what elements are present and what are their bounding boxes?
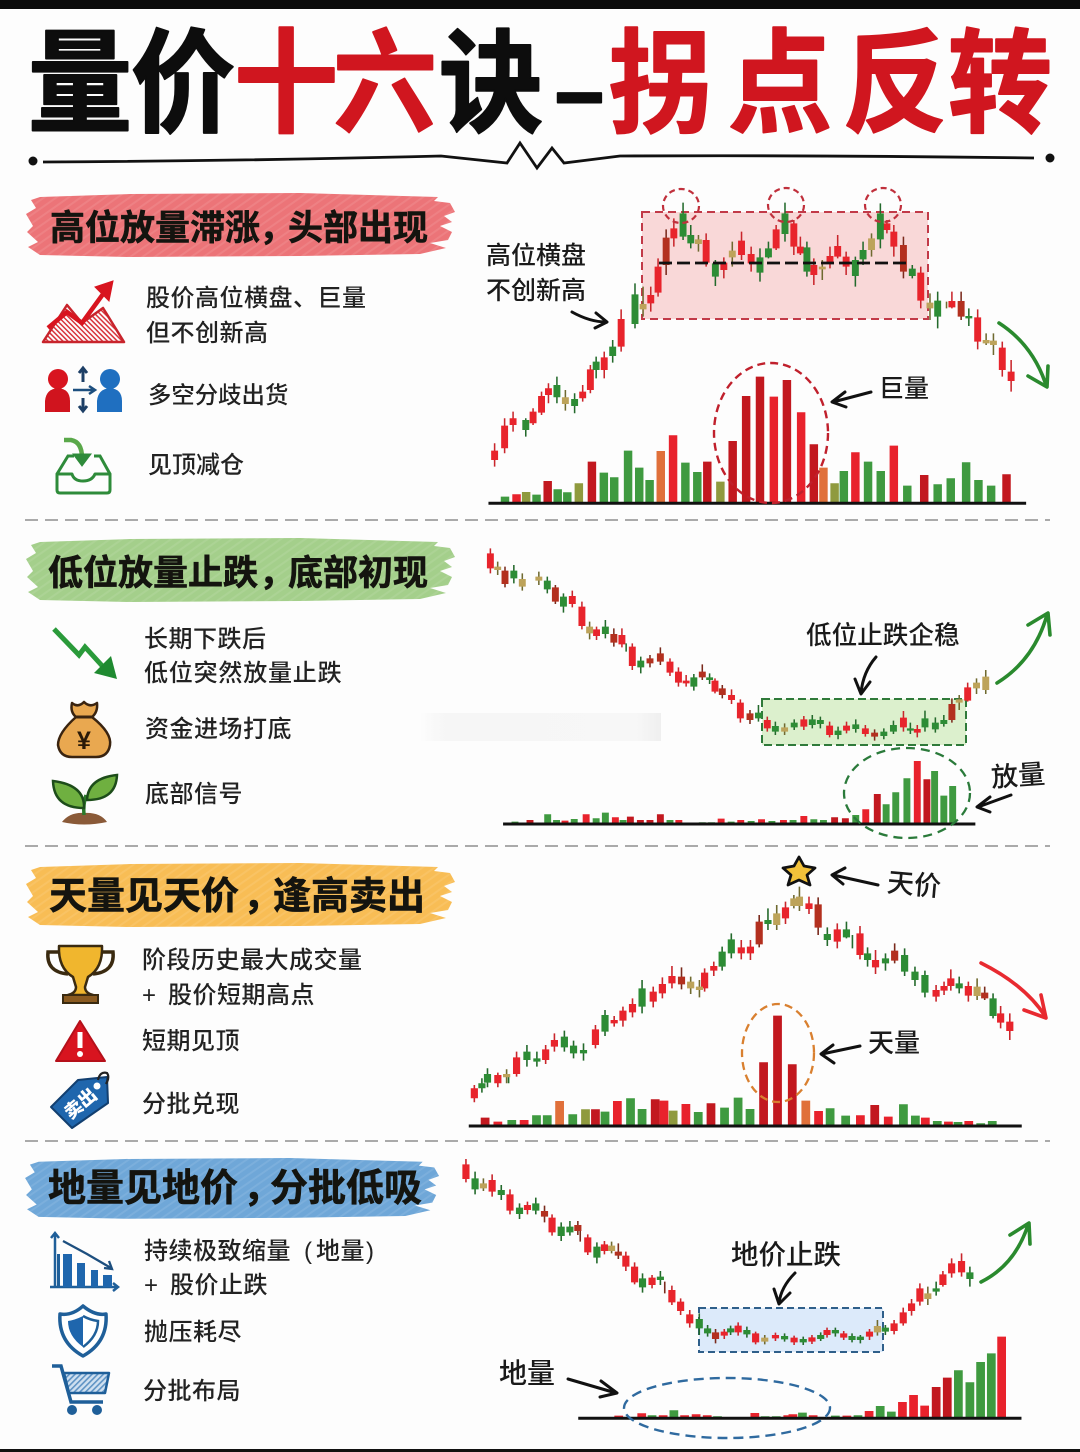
heading: section 1: 高位放量滞涨 — [50, 209, 260, 248]
arrow: to high range — [572, 312, 607, 328]
text: divergence: 多空分歧出货 — [148, 382, 288, 408]
volume bars: bottom formation — [503, 761, 975, 824]
arrow: rising green — [981, 1223, 1030, 1282]
heading: section 1 — [26, 193, 455, 257]
heading: section 2: 低位放量止跌 — [48, 554, 258, 593]
text: short term high: + — [142, 982, 157, 1009]
heading: section 4 — [25, 1158, 439, 1219]
icon: inbox reduce position — [57, 440, 110, 493]
icon: bulls vs bears — [45, 368, 122, 412]
text: largest volume: 阶段历史最大成交量 — [142, 947, 362, 974]
icon: green falling zigzag arrow — [54, 629, 117, 679]
text: short term top: 短期见顶 — [142, 1028, 240, 1055]
icon: rising arrow over mountains — [43, 281, 124, 342]
arrow: to peak volume — [821, 1045, 860, 1063]
icon: sell tag — [51, 1073, 108, 1128]
heading: section 1: ， — [259, 209, 294, 248]
label: sideways at high: 高位横盘 — [486, 242, 586, 270]
icon: shield — [60, 1306, 106, 1356]
label: peak price: 天价 — [886, 868, 942, 902]
text: after long decline: 长期下跌后 — [144, 626, 266, 653]
text: price stops falling: + — [144, 1272, 159, 1299]
heading text: section 4: 分批低吸 — [270, 1168, 422, 1210]
candlesticks: floor — [466, 1159, 970, 1345]
panel: section 1 high-volume stall — [26, 188, 1048, 503]
label: peak volume: 天量 — [868, 1028, 920, 1058]
icon: star at peak — [783, 857, 815, 885]
icon: money bag: ¥ — [77, 727, 91, 755]
label: low stabilization: 低位止跌企稳 — [806, 621, 960, 650]
label: floor volume: 地量 — [499, 1358, 555, 1389]
text: volume surge at low: 低位突然放量止跌 — [144, 660, 342, 687]
arrow: rising green — [997, 613, 1050, 683]
panel: section 4 floor volume floor price — [25, 1158, 1030, 1438]
heading: section 3: ， — [243, 876, 281, 918]
arrow: to floor volume — [568, 1379, 617, 1397]
text: extreme shrink: ) — [366, 1238, 374, 1265]
label: huge volume: 巨量 — [879, 375, 929, 403]
icon: sprout — [53, 775, 117, 824]
candlesticks: bottom formation — [490, 548, 986, 741]
callout box: high range — [642, 212, 928, 319]
heading: section 3 — [26, 863, 455, 927]
panel: section 3 peak volume peak price — [26, 857, 1046, 1128]
heading: section 3: 天量见天价 — [49, 876, 239, 918]
heading: section 3: 逢高卖出 — [273, 876, 425, 918]
text: build position in batches: 分批布局 — [143, 1378, 241, 1405]
heading: section 1: 头部出现 — [288, 209, 428, 248]
title: 反 — [843, 21, 947, 147]
title: 点 — [728, 21, 832, 147]
heading: section 2: ， — [259, 554, 294, 593]
callout: huge volume ellipse — [714, 363, 828, 503]
callout: volume surge ellipse — [844, 748, 970, 838]
text: no new high: 但不创新高 — [146, 320, 268, 347]
text: extreme shrink: 地量 — [316, 1238, 365, 1265]
heading: section 2 — [26, 538, 455, 602]
chart: price and volume, peak — [469, 857, 1046, 1126]
text: cash out in batches: 分批兑现 — [142, 1091, 240, 1118]
volume bars: top formation — [488, 377, 1026, 503]
icon: shopping cart — [52, 1366, 109, 1415]
title divider with zigzag — [28, 143, 1054, 168]
callout box: floor range — [699, 1308, 883, 1352]
title: 转 — [948, 21, 1052, 147]
text: capital enters: 资金进场打底 — [145, 716, 292, 743]
arrow: to volume increase — [977, 795, 1011, 812]
text: bottom signal: 底部信号 — [145, 781, 243, 808]
arrow: to floor range — [774, 1273, 795, 1304]
heading text: section 4: ， — [243, 1168, 281, 1210]
volume bars: peak — [469, 1016, 1022, 1126]
text: selling exhausted: 抛压耗尽 — [144, 1319, 242, 1346]
title: – — [555, 38, 604, 144]
decorative smudge — [420, 713, 661, 741]
arrow: to low range — [855, 657, 876, 694]
text: extreme shrink: 持续极致缩量 — [144, 1238, 291, 1265]
icon: warning — [56, 1021, 105, 1061]
callout: floor volume ellipse — [624, 1378, 830, 1438]
arrow: falling red — [981, 963, 1046, 1018]
text: high sideways: 股价高位横盘、巨量 — [146, 285, 366, 312]
label: floor price stop: 地价止跌 — [731, 1239, 841, 1270]
title: 量 — [28, 21, 132, 147]
volume bars: floor — [578, 1337, 1021, 1418]
chart: price and volume, floor — [466, 1159, 1030, 1438]
icon: trophy — [48, 946, 113, 1003]
heading text: section 4: 地量见地价 — [48, 1168, 238, 1210]
chart: price and volume, bottom formation — [490, 548, 1050, 838]
title: 诀 — [439, 21, 543, 147]
label: no new high: 不创新高 — [486, 277, 586, 305]
text: reduce at top: 见顶减仓 — [148, 452, 244, 479]
text: price stops falling: 股价止跌 — [170, 1272, 268, 1299]
panel: section 2 low-volume stop — [26, 538, 1050, 838]
arrow: to star — [832, 868, 878, 885]
icon: sell tag: 卖出 — [60, 1085, 101, 1123]
arrow: falling green — [999, 323, 1048, 387]
text: short term high: 股价短期高点 — [168, 982, 315, 1009]
callout: three peaks circles — [663, 188, 901, 223]
candlesticks: top formation — [495, 203, 1011, 467]
callout box: low range — [762, 699, 966, 745]
icon: money bag — [58, 702, 110, 757]
arrow: to huge volume — [832, 392, 871, 407]
label: volume increase: 放量 — [990, 759, 1046, 793]
callout: peak volume ellipse — [742, 1004, 814, 1102]
title: 十 — [234, 21, 338, 147]
chart: price and volume, top formation — [486, 188, 1048, 503]
text: extreme shrink: ( — [304, 1238, 312, 1265]
title: 拐 — [609, 21, 713, 147]
icon: shrinking volume chart — [50, 1233, 118, 1291]
candlesticks: peak — [474, 887, 1010, 1102]
title: 价 — [131, 21, 235, 147]
heading: section 2: 底部初现 — [288, 554, 428, 593]
title: 六 — [333, 21, 437, 147]
